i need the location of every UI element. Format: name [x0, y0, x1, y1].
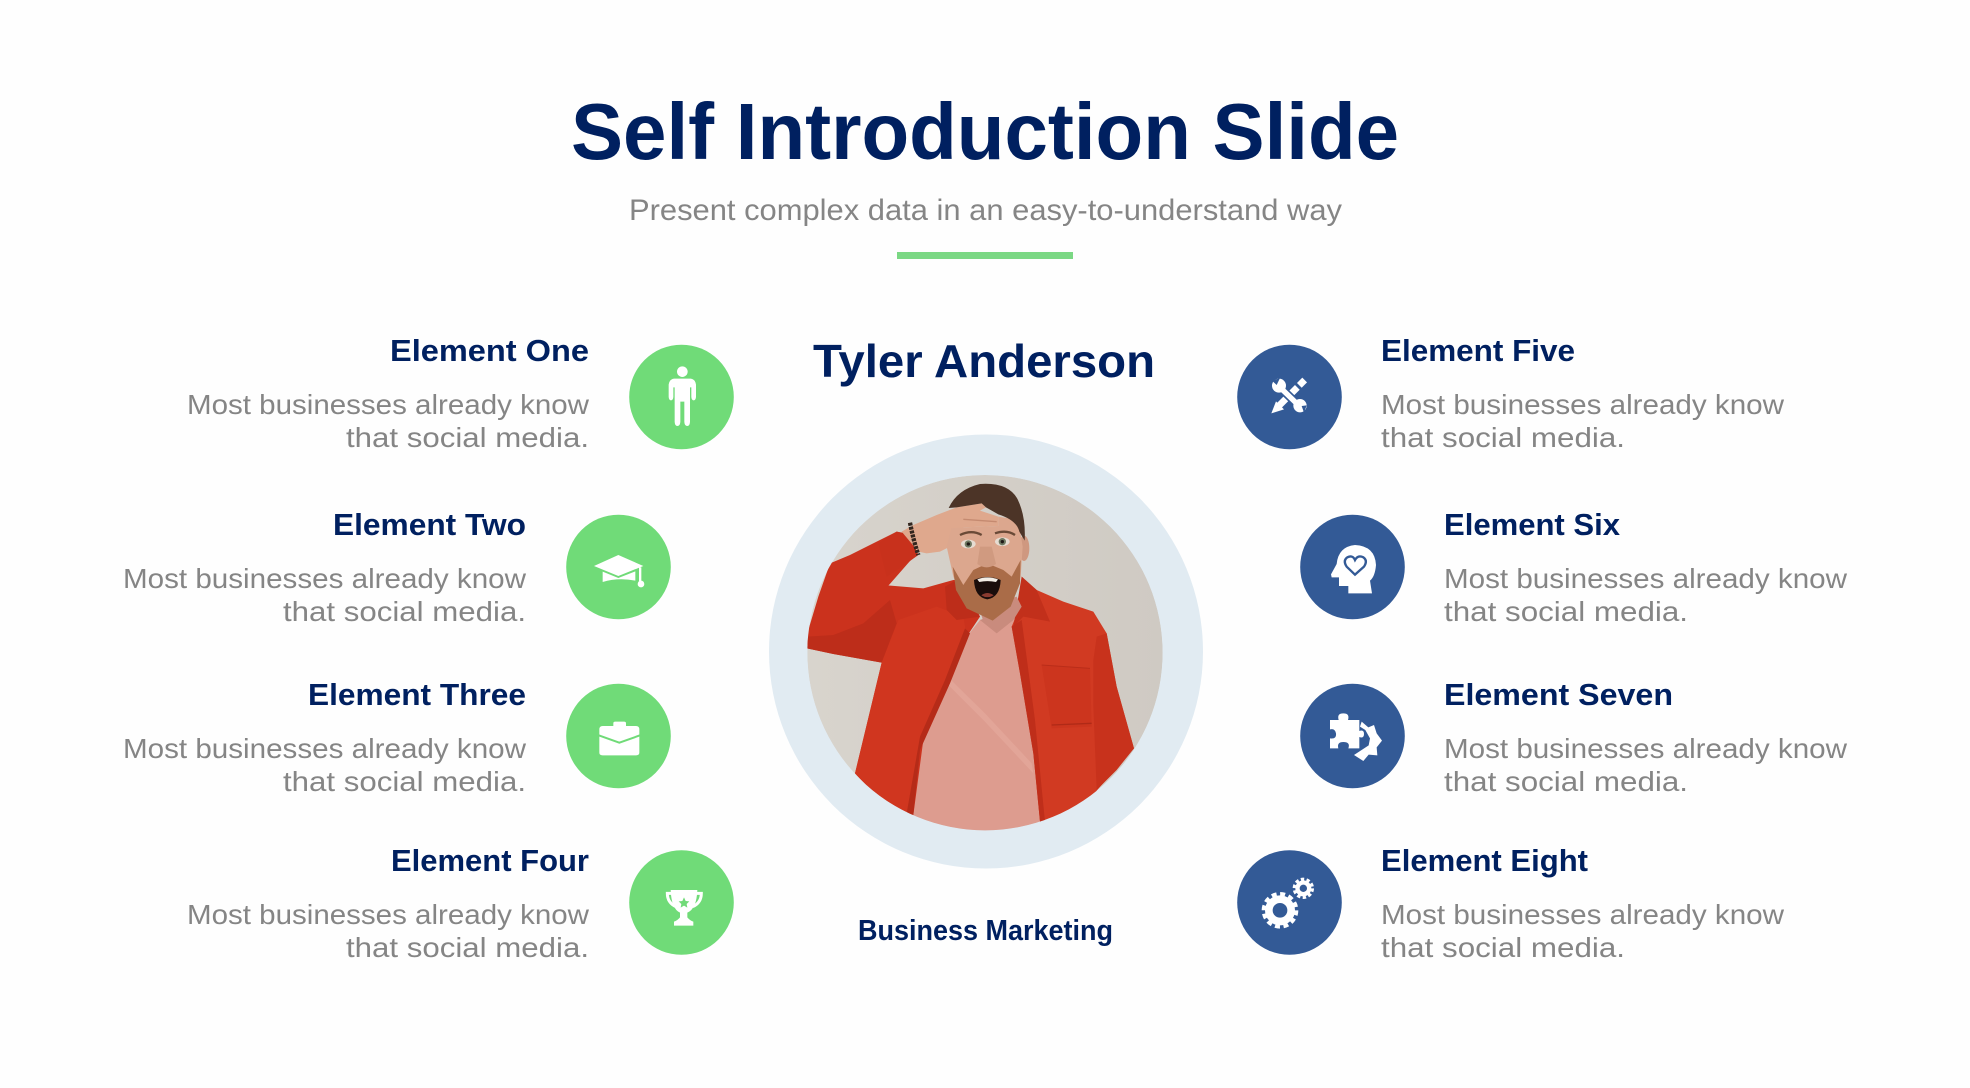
- name heading: Tyler Anderson: [813, 335, 1155, 387]
- caption: Business Marketing: [858, 915, 1113, 947]
- description: that social media.: [1381, 422, 1625, 453]
- description: that social media.: [346, 422, 589, 453]
- description: that social media.: [283, 766, 526, 797]
- cuff and hand: [894, 532, 918, 562]
- portrait illustration: [807, 475, 1163, 833]
- heading: Element Three: [308, 678, 526, 712]
- face: [947, 516, 1022, 585]
- infographic slide: [125, 101, 1847, 958]
- element six: [1300, 508, 1847, 627]
- heading: Element Seven: [1444, 678, 1673, 712]
- heading: Element One: [390, 334, 589, 368]
- jacket right: [1012, 577, 1134, 822]
- icon: puzzle and gear: [1300, 684, 1405, 788]
- description: Most businesses already know: [123, 733, 526, 764]
- green accent underline: [897, 252, 1073, 259]
- jacket left: [807, 532, 980, 815]
- outer ring: [769, 434, 1203, 868]
- description: Most businesses already know: [1444, 733, 1847, 764]
- portrait ring and photo illustration: [769, 434, 1203, 868]
- element eight: [1237, 844, 1784, 963]
- icon: wrench and pencil: [1237, 345, 1342, 449]
- t-shirt: [907, 607, 1043, 833]
- beads: [910, 523, 918, 555]
- description: Most businesses already know: [187, 389, 589, 420]
- icon: person: [629, 345, 734, 449]
- icon: graduation cap: [566, 515, 671, 619]
- description: that social media.: [1444, 766, 1688, 797]
- description: Most businesses already know: [123, 563, 526, 594]
- neck: [982, 596, 1022, 620]
- heading: Element Two: [333, 508, 526, 542]
- title: Self Introduction Slide: [571, 87, 1399, 176]
- hand fingers line: [963, 519, 997, 522]
- description: Most businesses already know: [1381, 389, 1784, 420]
- subtitle: Present complex data in an easy-to-understand way: [629, 194, 1342, 227]
- hair: [949, 484, 1025, 541]
- icon: gears: [1237, 850, 1342, 955]
- heading: Element Eight: [1381, 844, 1588, 878]
- element five: [1237, 334, 1784, 453]
- beard: [953, 560, 1021, 621]
- heading: Element Six: [1444, 508, 1620, 542]
- mouth: [974, 577, 1001, 599]
- icon: trophy: [629, 850, 734, 955]
- element two: [123, 508, 671, 627]
- heading: Element Five: [1381, 334, 1575, 368]
- icon: briefcase: [566, 684, 671, 788]
- description: Most businesses already know: [1381, 899, 1784, 930]
- ear: [1021, 536, 1030, 561]
- description: that social media.: [1444, 596, 1688, 627]
- icon: head with heart: [1300, 515, 1405, 619]
- description: Most businesses already know: [187, 899, 589, 930]
- element three: [123, 678, 671, 797]
- brows: [960, 532, 1015, 535]
- nose: [977, 547, 996, 567]
- eyes: [961, 540, 976, 548]
- heading: Element Four: [391, 844, 589, 878]
- element four: [187, 844, 734, 963]
- description: that social media.: [1381, 932, 1625, 963]
- description: Most businesses already know: [1444, 563, 1847, 594]
- description: that social media.: [346, 932, 589, 963]
- element seven: [1300, 678, 1847, 797]
- description: that social media.: [283, 596, 526, 627]
- element one: [187, 334, 734, 453]
